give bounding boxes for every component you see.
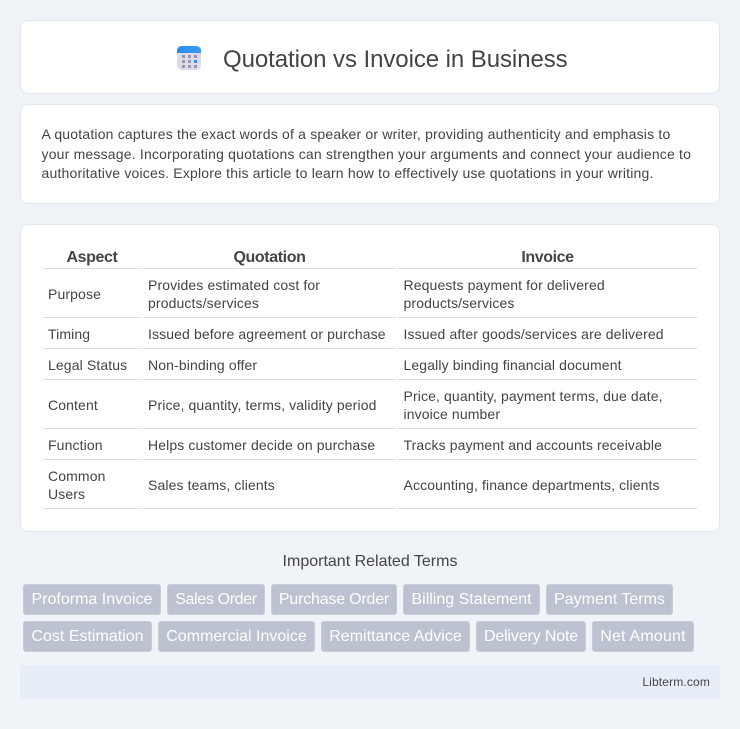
row: Legal Status: Legally binding financial document xyxy=(404,357,622,373)
chip xyxy=(23,584,161,615)
header panel xyxy=(20,20,720,94)
row: Content: Price, quantity, payment terms, due date, xyxy=(404,388,663,404)
comparison table panel xyxy=(20,224,720,532)
row: Timing: Timing xyxy=(48,326,90,342)
table header: Aspect: Aspect xyxy=(67,248,117,266)
chip: Proforma Invoice xyxy=(32,591,152,608)
row: Purpose xyxy=(48,277,605,311)
chip: Net Amount xyxy=(600,628,686,645)
chip: Remittance Advice xyxy=(329,628,462,645)
chip xyxy=(403,584,540,615)
chip xyxy=(167,584,265,615)
row: Common Users: Sales teams, clients xyxy=(148,477,275,493)
row: Content: invoice number xyxy=(404,406,500,422)
chip xyxy=(592,621,694,652)
row: Timing: Issued before agreement or purchase xyxy=(148,326,386,342)
intro paragraph xyxy=(42,126,691,181)
intro paragraph: your message. Incorporating quotations can strengthen your arguments and connect your audience to xyxy=(42,146,691,162)
chip xyxy=(271,584,397,615)
chip xyxy=(476,621,586,652)
row: Legal Status xyxy=(48,357,622,373)
row: Legal Status: Non-binding offer xyxy=(148,357,257,373)
table header: Invoice: Invoice xyxy=(521,248,574,266)
row: Common Users: Accounting, finance departments, clients xyxy=(404,477,660,493)
related terms heading: Important Related Terms xyxy=(283,553,457,570)
footer credit: Libterm.com xyxy=(642,675,710,689)
chip: Purchase Order xyxy=(279,591,389,608)
row: Content xyxy=(48,388,663,422)
row: Purpose: Requests payment for delivered xyxy=(404,277,605,293)
chip xyxy=(158,621,315,652)
row: Content: Content xyxy=(48,397,98,413)
row: Function: Function xyxy=(48,437,103,453)
row: Timing xyxy=(48,326,664,342)
title: Quotation vs Invoice in Business xyxy=(223,46,568,72)
chip: Cost Estimation xyxy=(31,628,144,645)
table header: Quotation: Quotation xyxy=(234,248,305,266)
related terms chips xyxy=(23,584,694,652)
chip: Sales Order xyxy=(175,591,257,608)
chip xyxy=(546,584,673,615)
row: Common Users xyxy=(48,468,660,502)
row: Legal Status: Legal Status xyxy=(48,357,127,373)
row: Function: Tracks payment and accounts receivable xyxy=(404,437,662,453)
chip: Commercial Invoice xyxy=(166,628,307,645)
row: Function xyxy=(48,437,662,453)
chip xyxy=(321,621,470,652)
row: Common Users: Common xyxy=(48,468,106,484)
icon: calendar xyxy=(177,46,201,70)
intro paragraph: A quotation captures the exact words of a speaker or writer, providing authenticity and emphasis to xyxy=(42,126,670,142)
row: Purpose: products/services xyxy=(404,295,514,311)
intro text panel xyxy=(20,104,720,204)
row: Purpose: Provides estimated cost for xyxy=(148,277,320,293)
footer bar xyxy=(20,665,720,699)
row: Timing: Issued after goods/services are delivered xyxy=(404,326,664,342)
row: Common Users: Users xyxy=(48,486,85,502)
row: Purpose: Purpose xyxy=(48,286,101,302)
chip: Delivery Note xyxy=(484,628,578,645)
chip xyxy=(23,621,152,652)
chip: Payment Terms xyxy=(554,591,665,608)
row: Function: Helps customer decide on purchase xyxy=(148,437,375,453)
chip: Billing Statement xyxy=(411,591,532,608)
row: Content: Price, quantity, terms, validity period xyxy=(148,397,377,413)
intro paragraph: authoritative voices. Explore this article to learn how to effectively use quotations in your writing. xyxy=(42,165,654,181)
row: Purpose: products/services xyxy=(148,295,259,311)
